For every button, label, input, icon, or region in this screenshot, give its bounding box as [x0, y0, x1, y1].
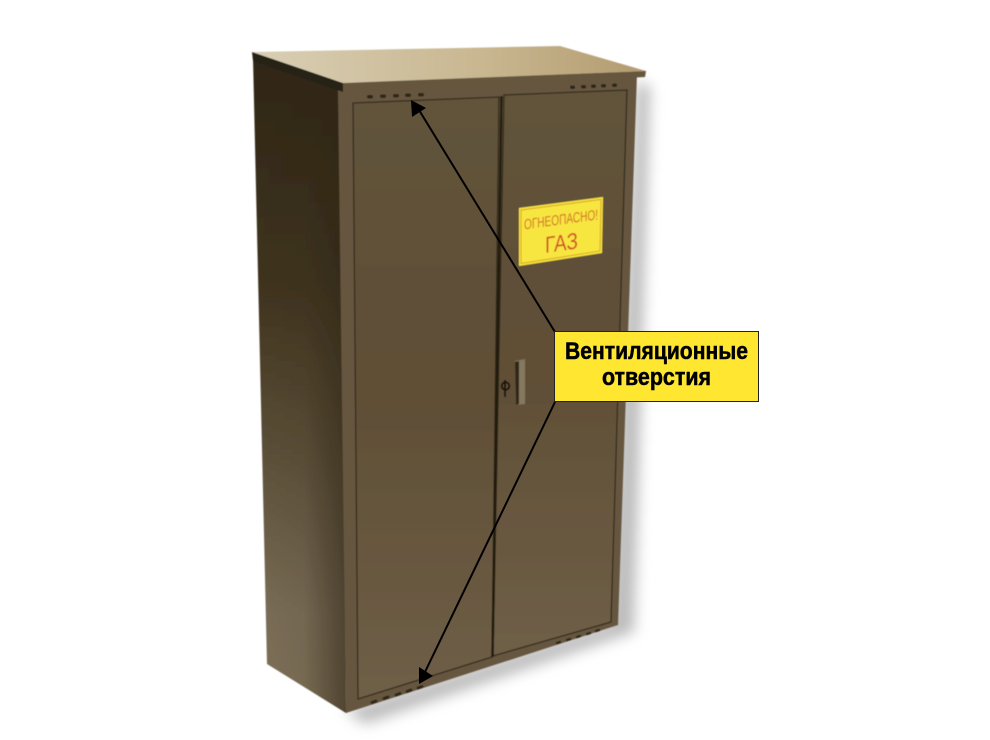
roof side edge — [252, 52, 343, 92]
arrow to bottom vents — [419, 402, 555, 684]
door gap — [492, 96, 502, 657]
callout: ventilation holes label: отверстия — [602, 364, 711, 391]
top left vent holes — [367, 93, 424, 98]
top right vent holes — [570, 84, 617, 89]
arrow to top vents — [411, 100, 555, 332]
left door — [353, 97, 499, 699]
callout: ventilation holes label — [554, 332, 758, 402]
roof front edge — [343, 71, 646, 92]
door handle — [502, 359, 525, 405]
roof top — [252, 46, 646, 83]
sign text: gas: ГАЗ — [545, 227, 578, 258]
side panel — [253, 58, 346, 713]
bottom left vent holes — [372, 686, 422, 702]
right door — [493, 90, 627, 656]
callout: ventilation holes label: Вентиляционные — [565, 338, 748, 365]
sign text: warning: ОГНЕОПАСНО! — [524, 207, 598, 233]
front frame — [338, 74, 637, 713]
cabinet shadow — [345, 82, 650, 724]
warning sign — [519, 197, 603, 266]
cabinet — [252, 46, 646, 713]
bottom right vent holes — [557, 630, 599, 643]
